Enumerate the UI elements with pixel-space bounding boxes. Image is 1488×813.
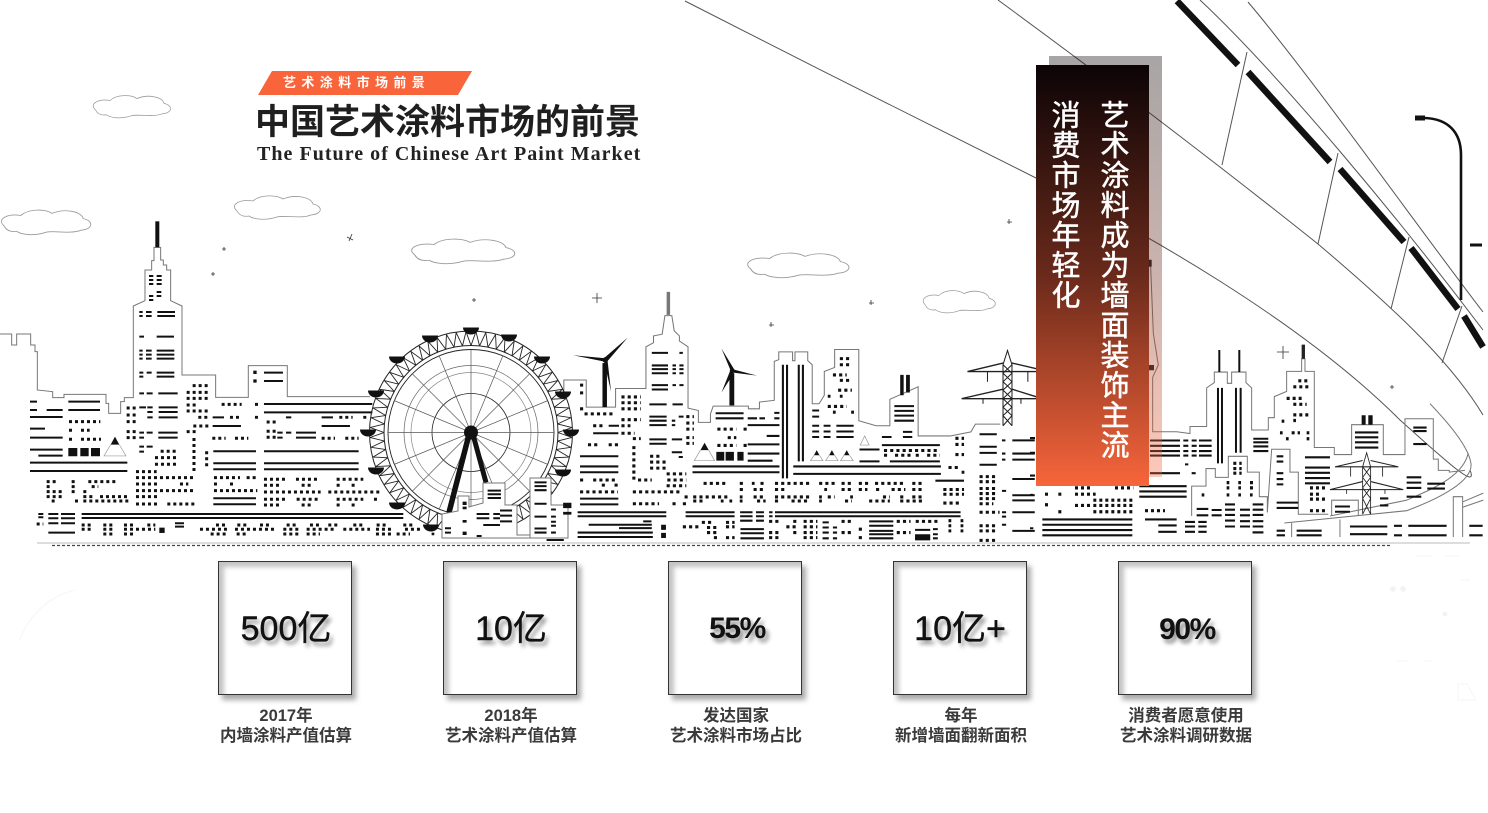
stat caption 3 [670, 706, 802, 745]
right skyline windows [1030, 350, 1483, 535]
wind turbine 1 [573, 338, 628, 407]
english subtitle: The Future of Chinese Art Paint Market [257, 143, 641, 165]
stat caption 4: 新增墙面翻新面积 [895, 727, 1027, 745]
ferris wheel [350, 311, 592, 554]
stat card 2 [443, 561, 577, 695]
stat card 4 [893, 561, 1027, 695]
stat value 3: 55% [709, 612, 765, 645]
stat caption 1: 2017年 [259, 707, 313, 725]
main heading: 中国艺术涂料市场的前景 [255, 103, 640, 142]
stat caption 3: 发达国家 [703, 707, 769, 725]
middle skyline windows [500, 338, 1037, 540]
stat caption 5: 消费者愿意使用 [1128, 707, 1244, 725]
left skyline outline [0, 221, 370, 413]
cloud 3 [234, 196, 320, 219]
wheel legs and hub [449, 426, 486, 512]
stat caption 5 [1120, 706, 1252, 745]
stat caption 4 [895, 706, 1027, 745]
orange tag [258, 71, 472, 95]
left skyline windows [30, 276, 501, 536]
panel text: 消费市场年轻化: 消费市场年轻化 [1047, 100, 1079, 310]
overpass thick stripes [1177, 1, 1483, 347]
overpass road lines [685, 0, 1483, 477]
street lamp [1415, 118, 1482, 300]
buildings in front of wheel [442, 478, 568, 538]
stat caption 1 [220, 706, 352, 745]
stat caption 1: 内墙涂料产值估算 [220, 727, 352, 745]
stat caption 2: 2018年 [484, 707, 538, 725]
stat value 2: 10亿 [475, 610, 547, 648]
stat value 4: 10亿+ [914, 610, 1006, 648]
cloud 6 [923, 291, 995, 313]
pylon 2 [1330, 453, 1403, 514]
stat card 1 [218, 561, 352, 695]
stat card 3 [668, 561, 802, 695]
tag text: 艺术涂料市场前景 [283, 75, 430, 90]
faint background decoration [20, 556, 1476, 700]
gondolas [360, 328, 579, 532]
stat caption 3: 艺术涂料市场占比 [670, 727, 802, 745]
panel text: 艺术涂料成为墙面装饰主流: 艺术涂料成为墙面装饰主流 [1096, 100, 1128, 460]
right skyline outline [1149, 260, 1483, 537]
stat caption 5: 艺术涂料调研数据 [1120, 727, 1252, 745]
main gradient panel [1036, 65, 1149, 486]
wind turbine 2 [721, 348, 757, 405]
stat value 5: 90% [1159, 613, 1215, 646]
stat card 5 [1118, 561, 1252, 695]
stat caption 4: 每年 [944, 707, 978, 725]
cloud 5 [748, 253, 849, 278]
middle skyline outline [564, 292, 1000, 436]
stars [211, 219, 1394, 389]
pylon 1 [962, 351, 1037, 426]
cloud 4 [412, 239, 515, 264]
stat value 1: 500亿 [241, 610, 331, 648]
cloud 1 [93, 96, 171, 118]
ground dashed line [37, 543, 1470, 546]
stat caption 2: 艺术涂料产值估算 [445, 727, 577, 745]
stat caption 2 [445, 706, 577, 745]
cloud 2 [1, 210, 91, 235]
